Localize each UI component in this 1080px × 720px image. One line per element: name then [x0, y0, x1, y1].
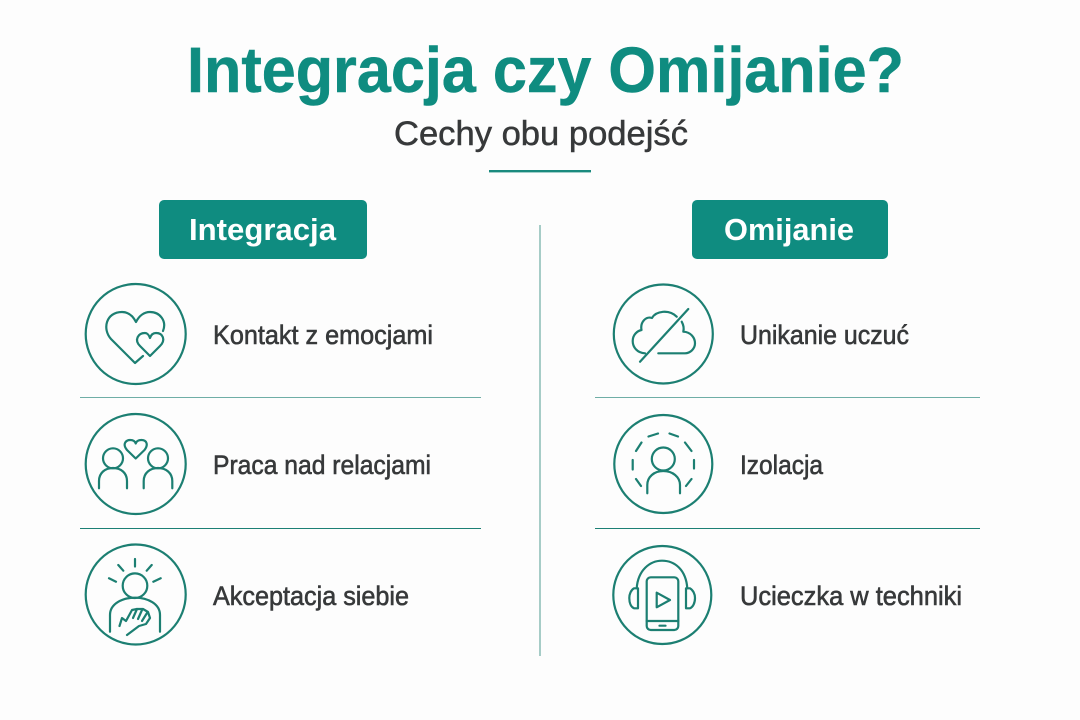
label: Unikanie uczuć: Unikanie uczuć	[740, 320, 909, 350]
icon: two people with heart	[86, 414, 186, 514]
label: Akceptacja siebie: Akceptacja siebie	[213, 581, 409, 611]
icon: crossed-out cloud	[614, 284, 713, 384]
panel: Integracja	[80, 200, 481, 644]
icon: isolated person	[614, 415, 712, 513]
panel: Omijanie	[595, 200, 980, 644]
label: Kontakt z emocjami: Kontakt z emocjami	[213, 320, 433, 350]
centre divider	[539, 225, 541, 656]
icon: two hearts	[86, 284, 186, 384]
subtitle: Cechy obu podejść	[394, 115, 688, 153]
heading badge: Omijanie	[692, 200, 888, 259]
heading badge: Omijanie: Omijanie	[724, 212, 854, 247]
label: Praca nad relacjami: Praca nad relacjami	[213, 450, 431, 480]
title: Integracja czy Omijanie?	[187, 34, 904, 106]
heading badge: Integracja	[159, 200, 367, 259]
label: Ucieczka w techniki: Ucieczka w techniki	[740, 581, 962, 611]
icon: person with hand on heart	[86, 544, 186, 644]
label: Izolacja: Izolacja	[740, 450, 824, 480]
icon: phone with headphones	[613, 546, 711, 644]
heading badge: Integracja: Integracja	[189, 212, 337, 247]
title underline	[489, 170, 591, 172]
